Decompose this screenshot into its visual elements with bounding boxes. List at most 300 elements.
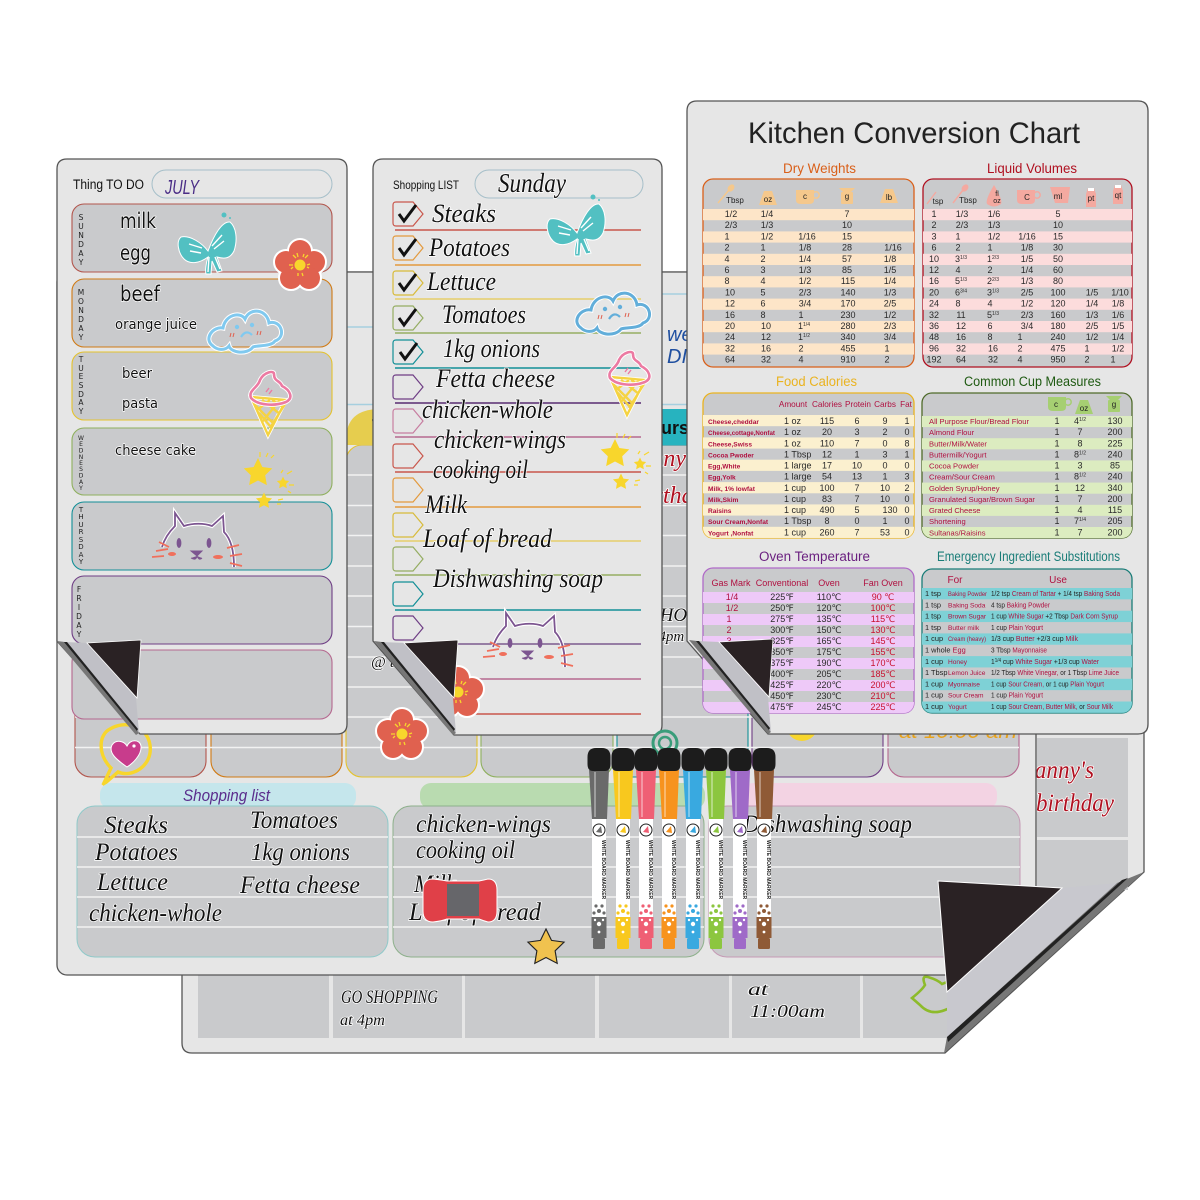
liquid volumes rows: 5 <box>955 276 960 286</box>
dry weights rows: 2/3 <box>799 287 811 297</box>
panel: weekly planner board <box>57 272 1036 975</box>
food calories rows: 17 <box>822 460 832 470</box>
dry weights rows: 6 <box>724 265 730 275</box>
substitutions rows: 1 cup Plain Yogurt <box>991 691 1043 700</box>
dry weights header icons: lb <box>886 193 893 202</box>
liquid volumes rows: 20 <box>929 287 939 297</box>
pill: shopping list <box>100 783 356 809</box>
dry weights rows: 140 <box>840 287 856 297</box>
oven rows: 220℃ <box>816 680 842 690</box>
oven rows: 200℃ <box>870 680 896 690</box>
liquid volumes rows: 3/4 <box>960 288 967 294</box>
substitutions rows: 1 cup Sour Cream, Butter Milk, or Sour Milk <box>991 702 1113 711</box>
handwritten list items: Dishwashing soap <box>432 564 603 593</box>
common cup rows: 1 <box>1054 472 1060 482</box>
note: Thursday shopping: at 4pm <box>643 629 684 645</box>
icon: flower <box>377 709 427 758</box>
handwritten shopping list text: chicken-whole <box>89 900 222 927</box>
common cup header icons: g <box>1112 400 1116 409</box>
liquid volumes rows: 240 <box>1050 332 1066 342</box>
icon: bow <box>547 194 605 256</box>
common cup rows: Butter/Milk/Water <box>929 439 987 448</box>
common cup rows: Buttermilk/Yogurt <box>929 450 987 459</box>
substitutions rows: 1 tsp <box>925 623 941 632</box>
liquid volumes rows: 1/3 <box>960 277 967 283</box>
food calories rows: Cheese,Swiss <box>708 441 752 448</box>
magnetic corner curl: things to do <box>57 640 141 735</box>
calendar side cells <box>1037 738 1128 890</box>
icon: stars <box>601 433 651 489</box>
magnetic corner curl: shopping list <box>374 640 458 735</box>
oven rows: 230℃ <box>816 691 842 701</box>
liquid volumes rows: 6 <box>931 243 937 253</box>
oven rows: 400℉ <box>770 669 794 679</box>
dry weights rows: 3/4 <box>884 332 896 342</box>
marker: gray <box>588 748 610 949</box>
liquid volumes rows: 4 <box>987 299 993 309</box>
food calories header <box>779 400 913 409</box>
dry weights rows: 1/4 <box>803 322 810 328</box>
liquid volumes header icons: C <box>1024 193 1030 202</box>
food calories rows: 1 Tbsp <box>784 516 811 526</box>
day row: Tuesday: E <box>79 372 84 381</box>
oven header: Oven <box>818 578 840 588</box>
panel: things to do board <box>57 159 347 734</box>
liquid volumes rows: 160 <box>1050 310 1066 320</box>
planner top notes area <box>75 294 1020 404</box>
dry weights rows: 340 <box>840 332 856 342</box>
oven rows: 90 ℃ <box>872 592 894 602</box>
dry weights rows: 1/2 <box>884 310 896 320</box>
dry weights rows: 2/5 <box>884 299 896 309</box>
substitutions rows: 1 cup <box>925 702 943 711</box>
dry weights rows: 10 <box>725 287 735 297</box>
icon: ice cream <box>609 352 649 415</box>
day row: Monday: D <box>78 315 84 324</box>
dry weights rows: 4 <box>760 276 766 286</box>
liquid volumes rows: 1/3 <box>1021 276 1033 286</box>
day columns <box>75 445 1019 777</box>
day row: Monday: O <box>78 297 84 306</box>
food calories rows: 54 <box>822 472 832 482</box>
day row: Tuesday: pasta <box>122 396 158 412</box>
common cup rows: 200 <box>1107 527 1123 537</box>
food calories rows: 2 <box>882 427 888 437</box>
handwritten shopping list text: Lettuce <box>96 869 168 896</box>
common cup header icons: oz <box>1080 404 1088 413</box>
common cup rows: Almond Flour <box>929 428 975 437</box>
table: food calories <box>703 374 914 538</box>
oven rows: 150℃ <box>816 625 842 635</box>
liquid volumes rows: 1/4 <box>1112 332 1124 342</box>
substitutions rows: Honey <box>948 659 968 666</box>
common cup rows: 8 <box>1074 472 1079 482</box>
liquid volumes rows: 48 <box>929 332 939 342</box>
dry weights rows: 170 <box>840 299 856 309</box>
common cup rows: 225 <box>1107 438 1123 448</box>
liquid volumes rows: 16 <box>988 343 998 353</box>
liquid volumes rows: 6 <box>987 321 993 331</box>
substitutions rows: Baking Powder <box>948 591 988 598</box>
substitutions header <box>948 575 1067 586</box>
liquid volumes rows: 1 <box>1017 332 1023 342</box>
liquid volumes rows: 100 <box>1050 287 1066 297</box>
dry weights rows: 3 <box>760 265 766 275</box>
substitutions rows: 1/3 cup Butter +2/3 cup Milk <box>991 634 1078 643</box>
food calories rows: 0 <box>904 427 910 437</box>
liquid volumes rows: 1 <box>987 243 993 253</box>
food calories rows: Cheese,cottage,Nonfat <box>708 430 776 437</box>
day row: Monday <box>72 279 332 347</box>
table: liquid volumes: Liquid Volumes <box>987 161 1077 176</box>
day row: Sunday: N <box>78 231 84 240</box>
liquid volumes rows: 8 <box>955 299 961 309</box>
table: oven temperature: Oven Temperature <box>759 549 870 564</box>
food calories rows: 13 <box>852 472 862 482</box>
day row: Wednesday: Y <box>78 485 83 492</box>
note: weekly dinner: we <box>667 324 693 346</box>
substitutions rows: 1 whole Egg <box>925 646 966 654</box>
oven rows: 165℃ <box>816 636 842 646</box>
substitutions rows: 1 cup <box>925 691 943 700</box>
common cup rows: 240 <box>1107 472 1123 482</box>
liquid volumes rows: 6 <box>955 287 960 297</box>
dry weights rows: 115 <box>841 276 855 286</box>
dry weights rows: 3/4 <box>799 299 811 309</box>
handwritten middle list text <box>408 811 551 926</box>
liquid volumes rows: 2 <box>931 220 937 230</box>
dry weights rows: 10 <box>761 321 771 331</box>
common cup rows: 8 <box>1074 449 1079 459</box>
calendar bottom cells <box>198 960 947 1038</box>
day row: Tuesday: T <box>78 355 84 364</box>
liquid volumes rows: 1 <box>955 231 961 241</box>
icon: heart speech bubble <box>101 725 150 785</box>
substitutions rows: 1 tsp <box>925 600 941 609</box>
day row: Saturday <box>72 650 332 719</box>
food calories rows: 1 oz <box>784 427 802 437</box>
common cup rows: Cream/Sour Cream <box>929 473 995 482</box>
common cup rows: Cocoa Powder <box>929 462 979 470</box>
food calories rows: Milk, 1% lowfat <box>708 486 756 493</box>
dry weights rows: 1/8 <box>884 254 896 264</box>
oven rows: 115℃ <box>871 614 895 624</box>
dry weights rows: 1/3 <box>761 220 773 230</box>
dry weights rows: 4 <box>798 355 804 365</box>
day row: Thursday: D <box>78 543 84 551</box>
dry weights rows: 7 <box>844 209 850 219</box>
dry weights rows: 1/2 <box>725 209 737 219</box>
oven rows: 155℃ <box>870 647 896 657</box>
dry weights rows: 28 <box>842 243 852 253</box>
icon: cat <box>483 613 573 667</box>
liquid volumes header icons: tsp <box>933 197 944 206</box>
liquid volumes rows: 80 <box>1053 276 1063 286</box>
table: dry weights: Dry Weights <box>783 161 856 176</box>
liquid volumes rows: 1/3 <box>992 311 999 317</box>
day row: Friday <box>72 576 332 644</box>
food calories rows: 1 large <box>784 472 812 482</box>
day row: Thursday <box>72 502 332 570</box>
day row: Wednesday: S <box>79 466 83 473</box>
oven rows: 245℃ <box>816 702 842 712</box>
liquid volumes rows: 30 <box>1053 243 1063 253</box>
common cup rows: 7 <box>1077 527 1083 537</box>
liquid volumes rows: 24 <box>929 299 939 309</box>
liquid volumes rows: 2/3 <box>1021 310 1033 320</box>
liquid volumes rows: 475 <box>1050 343 1066 353</box>
liquid volumes rows: 16 <box>929 276 939 286</box>
panel: back calendar board <box>182 272 1144 1053</box>
food calories rows: 8 <box>824 516 830 526</box>
dry weights rows: 1 <box>724 231 730 241</box>
day row: Sunday <box>72 204 332 272</box>
food calories rows: 0 <box>854 516 860 526</box>
marker: purple: WHITE BOARD MARKER <box>741 840 747 900</box>
marker: blue: WHITE BOARD MARKER <box>694 840 700 900</box>
oven rows: 145℃ <box>870 636 896 646</box>
common cup rows: 1/4 <box>1079 517 1086 523</box>
common cup rows: Golden Syrup/Honey <box>929 484 1000 493</box>
note: Thursday birthday: Danny's <box>621 446 700 472</box>
handwritten list items: Potatoes <box>428 233 510 262</box>
liquid volumes rows: 2/3 <box>956 220 968 230</box>
dry weights rows: 1/8 <box>799 243 811 253</box>
checkbox tags <box>393 202 423 640</box>
marker: yellow: WHITE BOARD MARKER <box>624 840 630 900</box>
food calories rows: Sour Cream,Nonfat <box>708 519 769 526</box>
food calories rows: 0 <box>904 460 910 470</box>
oven rows: 210℃ <box>870 691 896 701</box>
table: emergency ingredient substitutions: Emergency Ingredient Substitutions <box>937 549 1120 564</box>
day row: Thursday: H <box>78 513 84 521</box>
food calories rows: Cheese,cheddar <box>708 419 759 426</box>
liquid volumes rows: 1/5 <box>1112 321 1124 331</box>
day row: Thursday: T <box>78 506 84 514</box>
dry weights rows: 1/4 <box>761 209 773 219</box>
day row: Monday: orange juice <box>115 317 197 333</box>
common cup rows: 1 <box>1054 527 1060 537</box>
food calories rows: Yogurt ,Nonfat <box>708 530 754 537</box>
liquid volumes header icons: oz <box>993 198 1001 205</box>
pill: pink <box>742 783 997 809</box>
oven rows: 250℉ <box>770 603 794 613</box>
table: common cup measures <box>922 374 1132 538</box>
oven rows <box>726 592 896 712</box>
dry weights rows: 1 <box>798 321 803 331</box>
day row: Tuesday: beer <box>122 366 152 382</box>
oven rows: 1 <box>726 614 732 624</box>
day row: Friday: D <box>76 612 82 621</box>
common cup rows: 3 <box>1077 460 1083 470</box>
food calories rows: Egg,Yolk <box>708 475 736 482</box>
marker: brown <box>752 748 776 949</box>
day row: Wednesday: D <box>79 448 84 454</box>
table: food calories: Food Calories <box>776 374 857 389</box>
dry weights rows: 15 <box>842 231 852 241</box>
dry weights rows: 2 <box>798 343 804 353</box>
day row: Wednesday <box>72 428 332 495</box>
liquid volumes header icons: qt <box>1115 191 1122 200</box>
common cup rows: 205 <box>1107 516 1123 526</box>
day row: Friday: Y <box>76 630 82 639</box>
food calories header: Protein <box>845 400 871 409</box>
table: liquid volumes <box>923 161 1132 367</box>
liquid volumes header icons: fl <box>995 191 999 198</box>
food calories rows: Raisins <box>708 508 732 515</box>
liquid volumes rows <box>926 209 1129 365</box>
box: shopping list left <box>77 806 388 957</box>
common cup rows: 1 <box>1054 516 1060 526</box>
liquid volumes rows: 3 <box>987 287 992 297</box>
liquid volumes rows: 2/3 <box>992 277 999 283</box>
dry weights rows: 6 <box>760 299 766 309</box>
dry weights rows <box>724 209 902 365</box>
dry weights rows: 32 <box>761 355 771 365</box>
dry weights rows: 1/5 <box>884 265 896 275</box>
food calories header: Calories <box>812 400 842 409</box>
icon: flower <box>275 240 325 289</box>
common cup rows: 7 <box>1077 427 1083 437</box>
liquid volumes rows: 1/3 <box>960 255 967 261</box>
substitutions rows: 1 cup <box>925 657 943 666</box>
food calories rows: 0 <box>882 438 888 448</box>
liquid volumes rows: 60 <box>1053 265 1063 275</box>
dry weights rows: 64 <box>725 355 735 365</box>
food calories rows: 1 cup <box>784 483 806 493</box>
liquid volumes rows: 1/3 <box>988 220 1000 230</box>
common cup rows: 1 <box>1054 449 1060 459</box>
day row: Monday: A <box>78 324 84 333</box>
liquid volumes header icons: ml <box>1054 192 1062 201</box>
food calories rows: 0 <box>904 505 910 515</box>
liquid volumes rows: 2 <box>955 243 961 253</box>
liquid volumes rows: 2 <box>987 265 993 275</box>
icon: green spiral <box>653 731 677 755</box>
liquid volumes rows: 1/5 <box>1021 254 1033 264</box>
common cup rows: All Purpose Flour/Bread Flour <box>929 417 1029 426</box>
food calories rows: 1 <box>854 449 860 459</box>
marker: pink: WHITE BOARD MARKER <box>647 840 653 900</box>
oven rows: 1/2 <box>726 603 738 613</box>
handwritten middle list text: Milk <box>413 871 457 898</box>
liquid volumes rows: 1 <box>987 254 992 264</box>
dry weights rows: 2 <box>760 254 766 264</box>
food calories rows: 1 Tbsp <box>784 449 811 459</box>
heading: shopping list: Shopping LIST <box>393 178 460 192</box>
day headers: Tuesday <box>372 416 444 436</box>
handwritten list items: Fetta cheese <box>435 364 555 393</box>
food calories rows: Cocoa Pwoder <box>708 452 754 459</box>
substitutions rows: 1/2 Tbsp White Vinegar, or 1 Tbsp Lime Juice <box>991 668 1119 677</box>
substitutions rows: 1 cup <box>925 679 943 688</box>
food calories rows: 1 oz <box>784 438 802 448</box>
substitutions rows: 3 Tbsp Mayonnaise <box>991 646 1047 654</box>
substitutions rows: 1 Tbsp <box>925 668 947 677</box>
pill: green <box>420 783 705 809</box>
common cup rows: 7 <box>1077 494 1083 504</box>
common cup rows: 8 <box>1077 438 1083 448</box>
day row: Thursday: R <box>79 528 84 536</box>
oven rows: 175℃ <box>816 647 842 657</box>
liquid volumes rows: 1 <box>931 209 937 219</box>
oven rows: 300℉ <box>770 625 794 635</box>
liquid volumes header icons <box>927 183 1123 207</box>
liquid volumes rows: 36 <box>929 321 939 331</box>
marker: green <box>704 748 728 949</box>
food calories rows: 7 <box>854 438 860 448</box>
oven rows: 135℃ <box>816 614 842 624</box>
common cup rows: 1/2 <box>1079 450 1086 456</box>
substitutions rows: 1 <box>991 657 995 666</box>
dry weights rows: 12 <box>725 299 735 309</box>
day row: Sunday: milk <box>120 209 157 233</box>
icon: stars <box>244 452 294 508</box>
liquid volumes rows: 1 <box>1084 343 1090 353</box>
substitutions rows: 1 cup Sour Cream, or 1 cup Plain Yogurt <box>991 679 1104 688</box>
common cup header icons <box>1048 396 1122 414</box>
day row: Thursday: S <box>79 536 84 544</box>
day row: Tuesday: U <box>78 364 84 373</box>
dry weights rows: 16 <box>725 310 735 320</box>
day pill: Sunday <box>498 168 566 198</box>
day row: Monday: beef <box>120 282 161 306</box>
handwritten list items: chicken-wings <box>434 425 566 454</box>
day row: Wednesday: cheese cake <box>115 443 196 459</box>
day row: Wednesday: N <box>79 454 83 461</box>
oven rows: 205℃ <box>816 669 842 679</box>
oven header: Gas Mark <box>711 578 751 588</box>
liquid volumes rows: 1 <box>1110 355 1116 365</box>
day row: Thursday: Y <box>78 558 84 566</box>
dry weights rows: 280 <box>840 321 856 331</box>
food calories rows: 3 <box>854 427 860 437</box>
common cup rows: 1/2 <box>1079 417 1086 423</box>
day row: Sunday: Y <box>78 258 84 267</box>
food calories rows: 5 <box>854 505 860 515</box>
food calories rows: 1 <box>904 449 910 459</box>
dry weights rows: 1/2 <box>803 333 810 339</box>
table: dry weights <box>703 161 914 367</box>
dry weights header icons: Tbsp <box>726 196 744 205</box>
liquid volumes rows: 1/6 <box>988 209 1000 219</box>
icon: cloud <box>209 311 282 352</box>
liquid volumes rows: 50 <box>1053 254 1063 264</box>
dry weights rows: 2 <box>884 355 890 365</box>
handwritten list items: Loaf of bread <box>422 524 553 553</box>
day row: Sunday: U <box>78 222 84 231</box>
handwritten list items: cooking oil <box>433 455 528 484</box>
icon: ice cream <box>250 372 290 435</box>
dry weights rows: 12 <box>761 332 771 342</box>
icon: flower clipped <box>452 665 485 718</box>
substitutions rows: 1 cup Plain Yogurt <box>991 623 1043 632</box>
substitutions rows: 1 cup <box>925 634 943 643</box>
substitutions header: For <box>948 575 963 586</box>
day row: Tuesday: Y <box>78 407 84 416</box>
table: common cup measures: Common Cup Measures <box>964 374 1101 389</box>
substitutions rows: Baking Soda <box>948 602 986 609</box>
liquid volumes rows: 2 <box>987 276 992 286</box>
day row: Tuesday: A <box>78 398 84 407</box>
marker: pink <box>634 748 658 949</box>
food calories rows: 115 <box>820 416 834 426</box>
common cup rows: Sultanas/Raisins <box>929 528 986 537</box>
note: Danny's birthday <box>1017 757 1115 817</box>
handwritten shopping list text: Tomatoes <box>250 807 338 834</box>
handwritten shopping list text: Fetta cheese <box>239 872 360 899</box>
substitutions rows: 1 cup White Sugar +2 Tbsp Dark Corn Syrup <box>991 612 1118 621</box>
